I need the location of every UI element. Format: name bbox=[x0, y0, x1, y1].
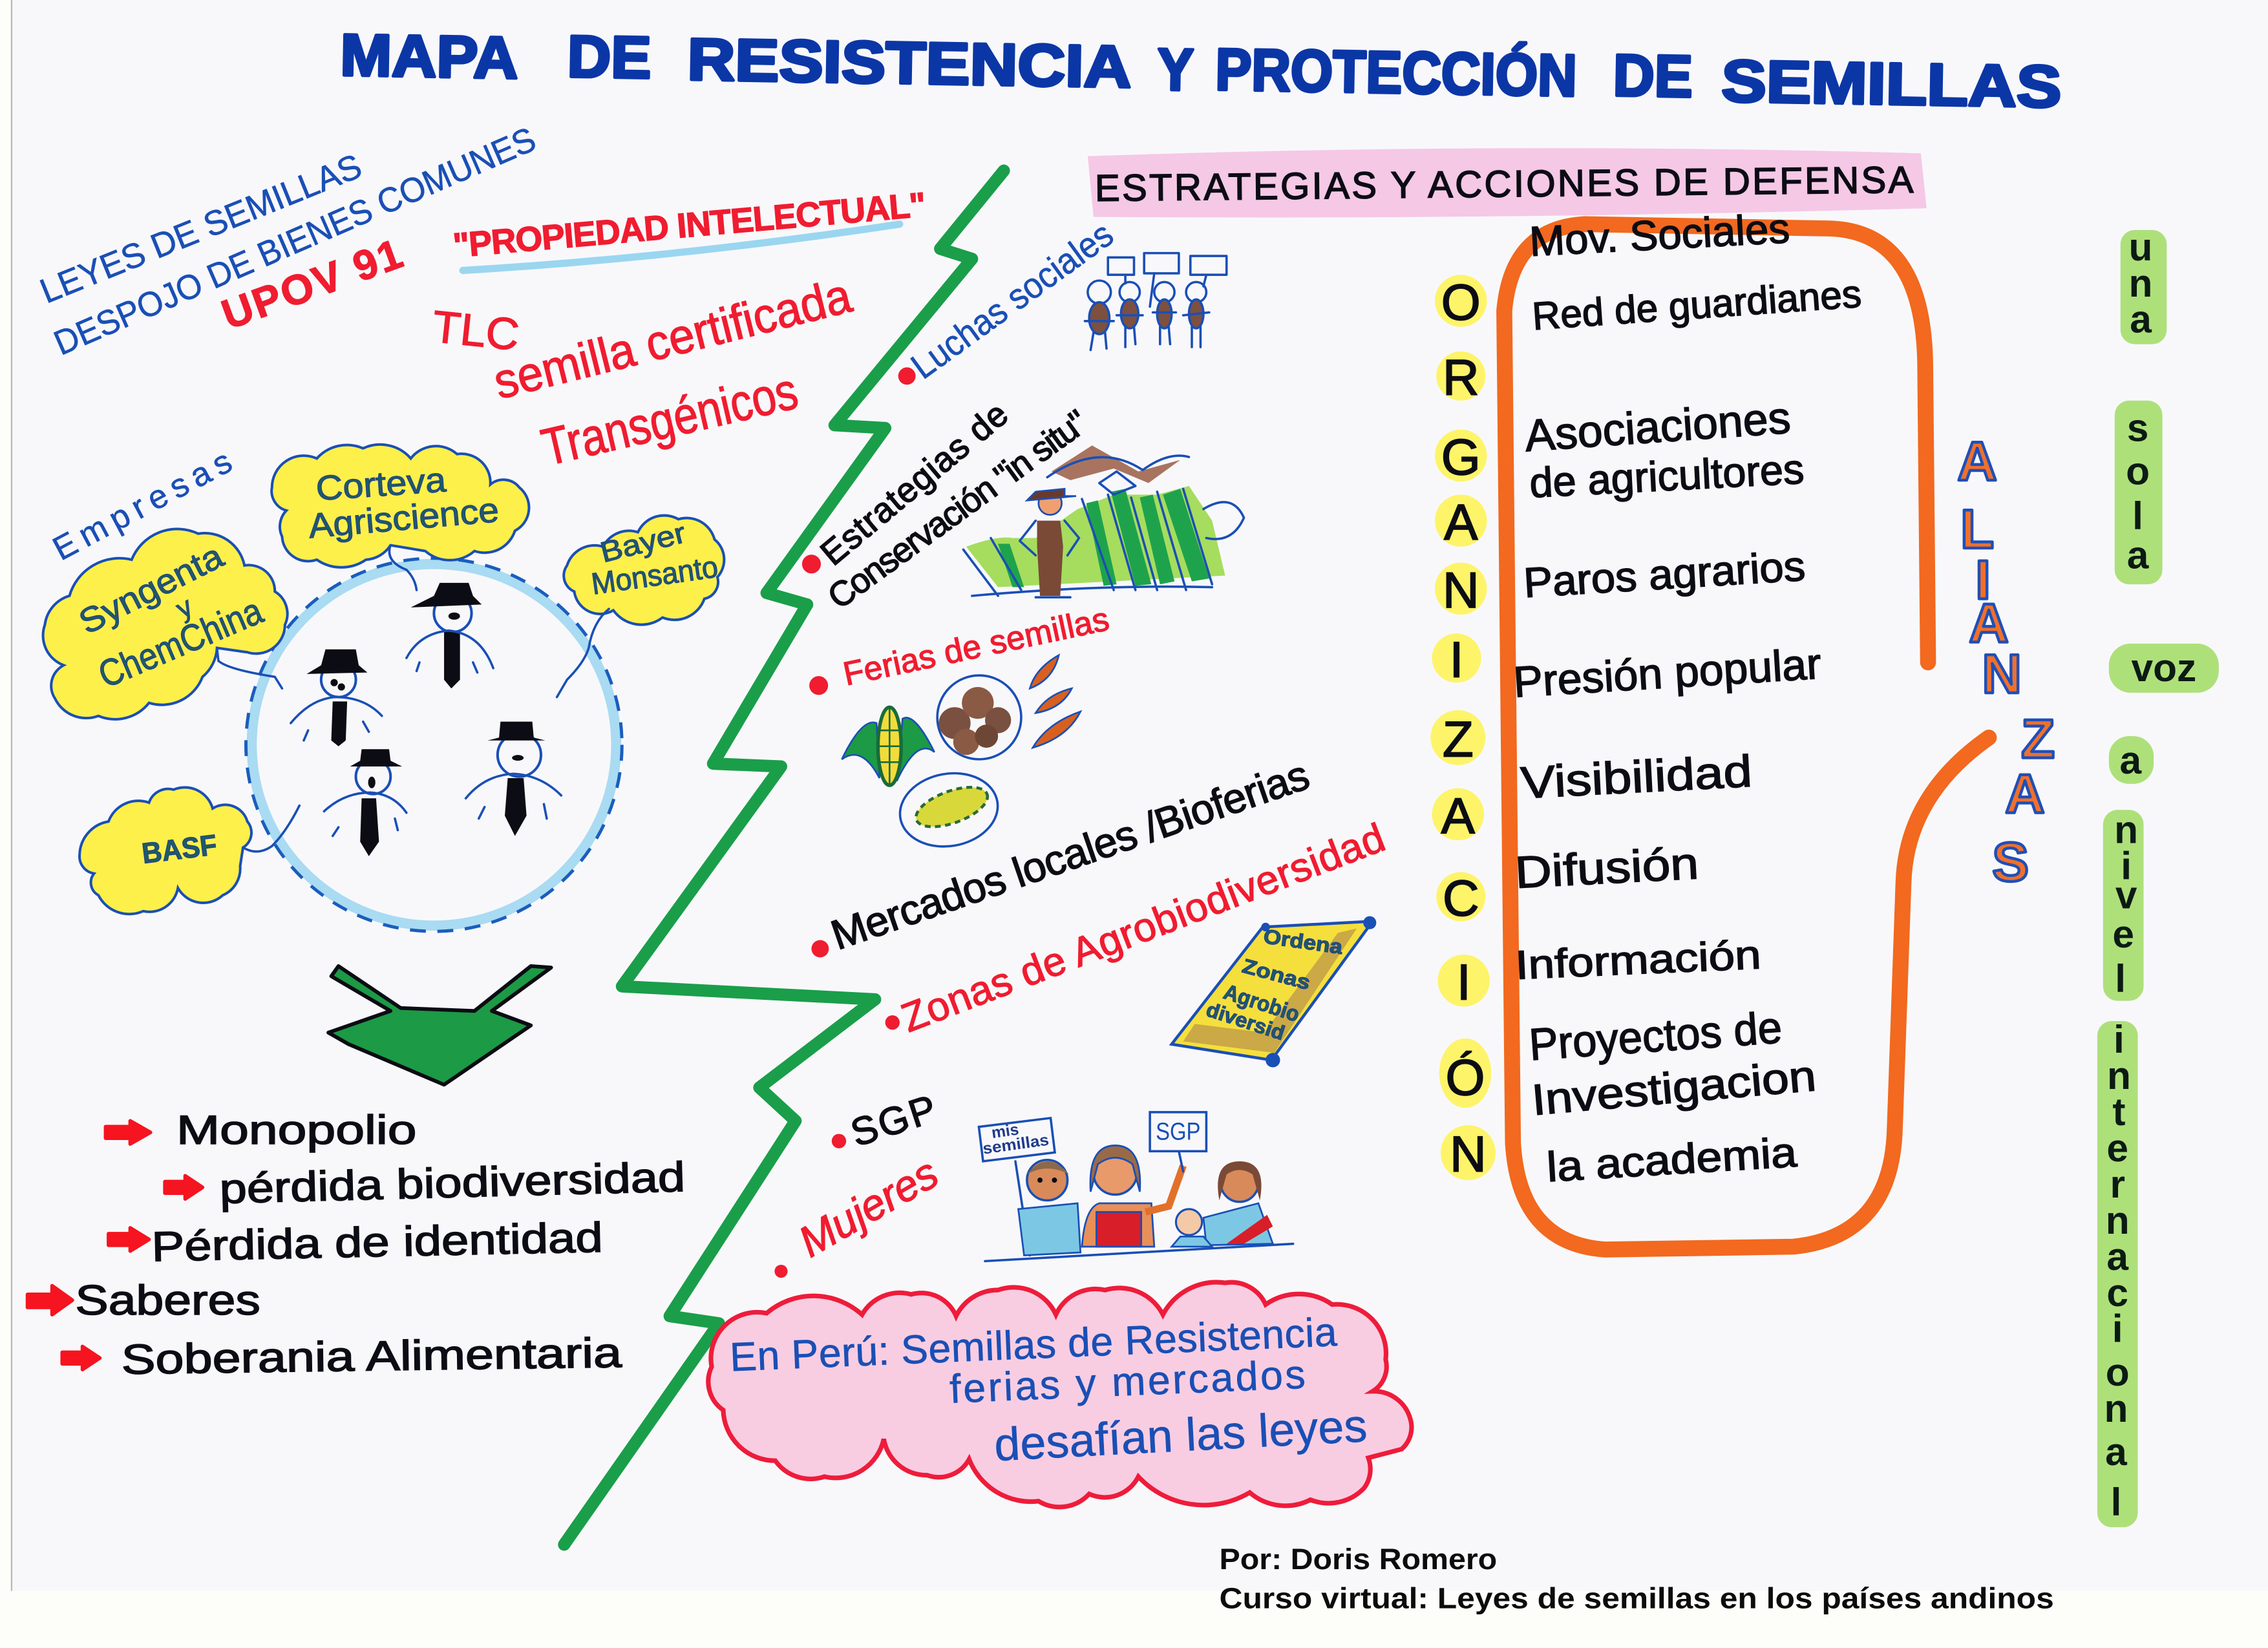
vertical phrase: una sola voz a nivel internacional bbox=[2097, 225, 2219, 1527]
vertical phrase: una sola voz a nivel internacional: o bbox=[2106, 1350, 2130, 1394]
vertical phrase: una sola voz a nivel internacional: a bbox=[2130, 297, 2152, 341]
title: DE bbox=[1613, 43, 1693, 110]
list: organisation actions: Mov. Sociales bbox=[1529, 204, 1791, 265]
item: estrategias in situ: Conservación "in situ" bbox=[821, 403, 1095, 617]
credits bbox=[1220, 1542, 2054, 1614]
item: perdida de identidad: Pérdida de identidad bbox=[151, 1214, 603, 1270]
vertical word: organizacion: O bbox=[1441, 274, 1481, 331]
title: SEMILLAS bbox=[1721, 48, 2062, 120]
cloud: Corteva Agriscience: Corteva bbox=[315, 460, 447, 508]
vertical word: alianzas: Z bbox=[2021, 709, 2055, 770]
vertical phrase: una sola voz a nivel internacional: e bbox=[2106, 1126, 2128, 1170]
item: luchas sociales: Luchas sociales bbox=[904, 213, 1121, 386]
arrow: green chevron down bbox=[328, 966, 551, 1084]
bracket: orange alliances brace bbox=[1504, 224, 1989, 1249]
vertical phrase: una sola voz a nivel internacional: i bbox=[2121, 844, 2132, 888]
icon: corn bbox=[842, 707, 935, 785]
title: RESISTENCIA bbox=[687, 26, 1132, 100]
icon: businessman 2 bbox=[407, 583, 493, 688]
vertical phrase: una sola voz a nivel internacional: n bbox=[2106, 1198, 2130, 1242]
icon: farmer and field bbox=[963, 445, 1244, 597]
cloud: Syngenta y ChemChina: ChemChina bbox=[92, 589, 269, 696]
list: organisation actions: Red de guardianes bbox=[1531, 271, 1863, 338]
vertical word: alianzas bbox=[1957, 431, 2055, 893]
text: despojo de bienes comunes: DESPOJO DE BIENES COMUNES bbox=[48, 120, 542, 363]
vertical word: organizacion: N bbox=[1450, 1126, 1487, 1183]
list: organisation actions: Presión popular bbox=[1512, 640, 1823, 707]
icon: plate of beans bbox=[937, 675, 1021, 759]
vertical word: organizacion: A bbox=[1441, 787, 1476, 844]
icon: scroll: Agrobio bbox=[1221, 980, 1302, 1027]
vertical phrase: una sola voz a nivel internacional: a bbox=[2106, 1234, 2128, 1278]
vertical phrase: una sola voz a nivel internacional: l bbox=[2111, 1480, 2121, 1524]
item: saberes bbox=[28, 1276, 260, 1324]
icon: scroll: diversid bbox=[1203, 998, 1288, 1044]
vertical word: alianzas: A bbox=[1957, 431, 1997, 492]
cloud: Bayer Monsanto bbox=[557, 516, 724, 697]
list: organisation actions: la academia bbox=[1545, 1128, 1799, 1190]
callout: Peru cloud bbox=[708, 1282, 1412, 1507]
vertical phrase: una sola voz a nivel internacional: a bbox=[2120, 738, 2142, 782]
list: organisation actions: Investigacion bbox=[1530, 1051, 1818, 1125]
vertical word: organizacion: C bbox=[1443, 870, 1479, 927]
vertical word: organizacion: I bbox=[1450, 631, 1463, 688]
panel: defence banner: ESTRATEGIAS Y ACCIONES DE DEFENSA bbox=[1095, 159, 1914, 209]
title: Y bbox=[1157, 37, 1194, 103]
list: organisation actions: Visibilidad bbox=[1520, 746, 1754, 808]
vertical phrase: una sola voz a nivel internacional: i bbox=[2114, 1017, 2125, 1061]
vertical phrase: una sola voz a nivel internacional: n bbox=[2107, 1053, 2131, 1097]
vertical phrase: una sola voz a nivel internacional: i bbox=[2112, 1307, 2123, 1351]
cloud: Syngenta y ChemChina: Syngenta bbox=[73, 536, 229, 642]
vertical word: organizacion: G bbox=[1441, 428, 1481, 485]
icon: plate of corn bbox=[894, 766, 1004, 854]
icon: scroll: Ordena bbox=[1262, 925, 1344, 958]
panel: legal context heading bbox=[35, 120, 927, 477]
cloud: Corteva Agriscience: Agriscience bbox=[307, 491, 500, 545]
cloud: Bayer Monsanto: Monsanto bbox=[589, 549, 720, 601]
vertical word: organizacion: R bbox=[1443, 349, 1479, 406]
item: estrategias in situ bbox=[802, 394, 1244, 617]
vertical phrase: una sola voz a nivel internacional: a bbox=[2127, 533, 2149, 576]
vertical phrase: una sola voz a nivel internacional: n bbox=[2129, 261, 2152, 305]
icon: businessman 4 bbox=[466, 722, 561, 836]
text: UPOV 91: UPOV 91 bbox=[215, 229, 408, 338]
cloud: Syngenta y ChemChina: y bbox=[171, 591, 198, 625]
text: TLC: TLC bbox=[430, 301, 522, 360]
underline: propiedad intelectual bbox=[463, 224, 900, 270]
icon: businessman 1 bbox=[291, 650, 382, 746]
icon: chilies bbox=[1030, 655, 1081, 748]
text: leyes de semillas: LEYES DE SEMILLAS bbox=[35, 147, 367, 311]
vertical word: organizacion bbox=[1430, 274, 1496, 1183]
text: semilla certificada: semilla certificada bbox=[489, 268, 857, 410]
cloud: Bayer Monsanto: Bayer bbox=[597, 516, 689, 569]
vertical word: alianzas: N bbox=[1982, 644, 2022, 705]
vertical phrase: una sola voz a nivel internacional: s bbox=[2127, 406, 2148, 450]
item: saberes: Saberes bbox=[75, 1276, 260, 1324]
text: desafian las leyes: desafían las leyes bbox=[993, 1400, 1368, 1471]
text: transgenicos: Transgénicos bbox=[536, 362, 803, 477]
item: mujeres: Mujeres bbox=[790, 1148, 946, 1267]
list: consequences bbox=[28, 1108, 686, 1383]
cloud: BASF: BASF bbox=[140, 829, 218, 870]
vertical phrase: una sola voz a nivel internacional: u bbox=[2129, 225, 2152, 269]
title bbox=[340, 22, 2062, 120]
icon: women with signs: SGP bbox=[1156, 1118, 1200, 1145]
item: soberania alimentaria: Soberania Alimentaria bbox=[121, 1329, 623, 1383]
vertical word: organizacion: Z bbox=[1443, 710, 1474, 767]
vertical word: organizacion: Ó bbox=[1446, 1049, 1485, 1106]
list: organisation actions bbox=[1512, 204, 1863, 1190]
vertical word: alianzas: I bbox=[1975, 549, 1991, 611]
vertical phrase: una sola voz a nivel internacional: r bbox=[2110, 1162, 2125, 1206]
item: perdida biodiversidad: pérdida biodiversidad bbox=[219, 1153, 686, 1212]
list: organisation actions: Asociaciones bbox=[1523, 392, 1792, 461]
icon: businessman 3 bbox=[324, 749, 407, 856]
item: luchas sociales bbox=[898, 213, 1227, 386]
list: organisation actions: Paros agrarios bbox=[1522, 542, 1807, 606]
item: monopolio: Monopolio bbox=[176, 1108, 417, 1153]
vertical phrase: una sola voz a nivel internacional: c bbox=[2106, 1271, 2128, 1315]
credits: Curso virtual: Leyes de semillas en los países andinos bbox=[1220, 1581, 2054, 1614]
vertical phrase: una sola voz a nivel internacional: e bbox=[2112, 912, 2134, 956]
vertical phrase: una sola voz a nivel internacional: a bbox=[2105, 1430, 2127, 1474]
list: organisation actions: Difusión bbox=[1514, 838, 1700, 898]
title: PROTECCIÓN bbox=[1214, 36, 1578, 109]
vertical word: alianzas: A bbox=[2005, 764, 2045, 825]
item: ferias de semillas: Ferias de semillas bbox=[840, 600, 1112, 692]
item: zonas de agrobiodiversidad: Zonas de Agrobiodiversidad bbox=[895, 815, 1391, 1041]
text: ferias y mercados: ferias y mercados bbox=[949, 1352, 1306, 1412]
text: propiedad intelectual: "PROPIEDAD INTELECTUAL" bbox=[452, 185, 927, 265]
list: organisation actions: de agricultores bbox=[1529, 445, 1805, 507]
cloud: Corteva Agriscience bbox=[271, 445, 529, 590]
vertical word: organizacion: I bbox=[1457, 953, 1471, 1010]
vertical phrase: una sola voz a nivel internacional: t bbox=[2112, 1090, 2126, 1134]
vertical phrase: una sola voz a nivel internacional: v bbox=[2115, 872, 2137, 916]
vertical word: organizacion: A bbox=[1444, 494, 1478, 551]
item: SGP: SGP bbox=[845, 1086, 942, 1155]
item: monopolio bbox=[105, 1108, 417, 1153]
item: ferias de semillas bbox=[809, 600, 1112, 854]
icon: scroll bbox=[1172, 916, 1376, 1068]
icon: women with signs: semillas bbox=[982, 1132, 1050, 1158]
text: en Peru: En Perú: Semillas de Resistencia bbox=[729, 1309, 1338, 1380]
title: MAPA bbox=[340, 22, 519, 91]
cloud: Syngenta y ChemChina bbox=[43, 529, 288, 719]
vertical phrase: una sola voz a nivel internacional: n bbox=[2114, 808, 2138, 852]
item: mercados locales: Mercados locales /Bioferias bbox=[825, 751, 1315, 958]
icon: women with signs bbox=[979, 1112, 1293, 1261]
icon: scroll: Zonas bbox=[1240, 955, 1313, 994]
vertical phrase: una sola voz a nivel internacional: l bbox=[2115, 956, 2126, 1000]
text: empresas: Empresas bbox=[47, 442, 238, 567]
lightning divider bbox=[564, 171, 1004, 1545]
vertical phrase: una sola voz a nivel internacional: n bbox=[2104, 1386, 2128, 1430]
icon: protesters bbox=[1085, 253, 1227, 350]
item: estrategias in situ: Estrategias de bbox=[813, 394, 1015, 573]
vertical word: alianzas: L bbox=[1960, 499, 1994, 560]
vertical word: alianzas: S bbox=[1992, 832, 2029, 893]
vertical word: organizacion: N bbox=[1443, 562, 1479, 618]
vertical word: alianzas: A bbox=[1969, 593, 2009, 655]
title: DE bbox=[567, 24, 652, 91]
cloud: BASF bbox=[79, 787, 299, 914]
diagram: companies circle bbox=[246, 558, 622, 931]
vertical phrase: una sola voz a nivel internacional: o bbox=[2126, 449, 2150, 493]
list: organisation actions: Proyectos de bbox=[1527, 1002, 1783, 1070]
icon: women with signs: mis bbox=[990, 1121, 1020, 1142]
list: organisation actions: Información bbox=[1514, 932, 1762, 988]
credits: Por: Doris Romero bbox=[1220, 1542, 1497, 1576]
vertical phrase: una sola voz a nivel internacional: voz bbox=[2131, 646, 2196, 690]
vertical phrase: una sola voz a nivel internacional: l bbox=[2132, 494, 2143, 538]
